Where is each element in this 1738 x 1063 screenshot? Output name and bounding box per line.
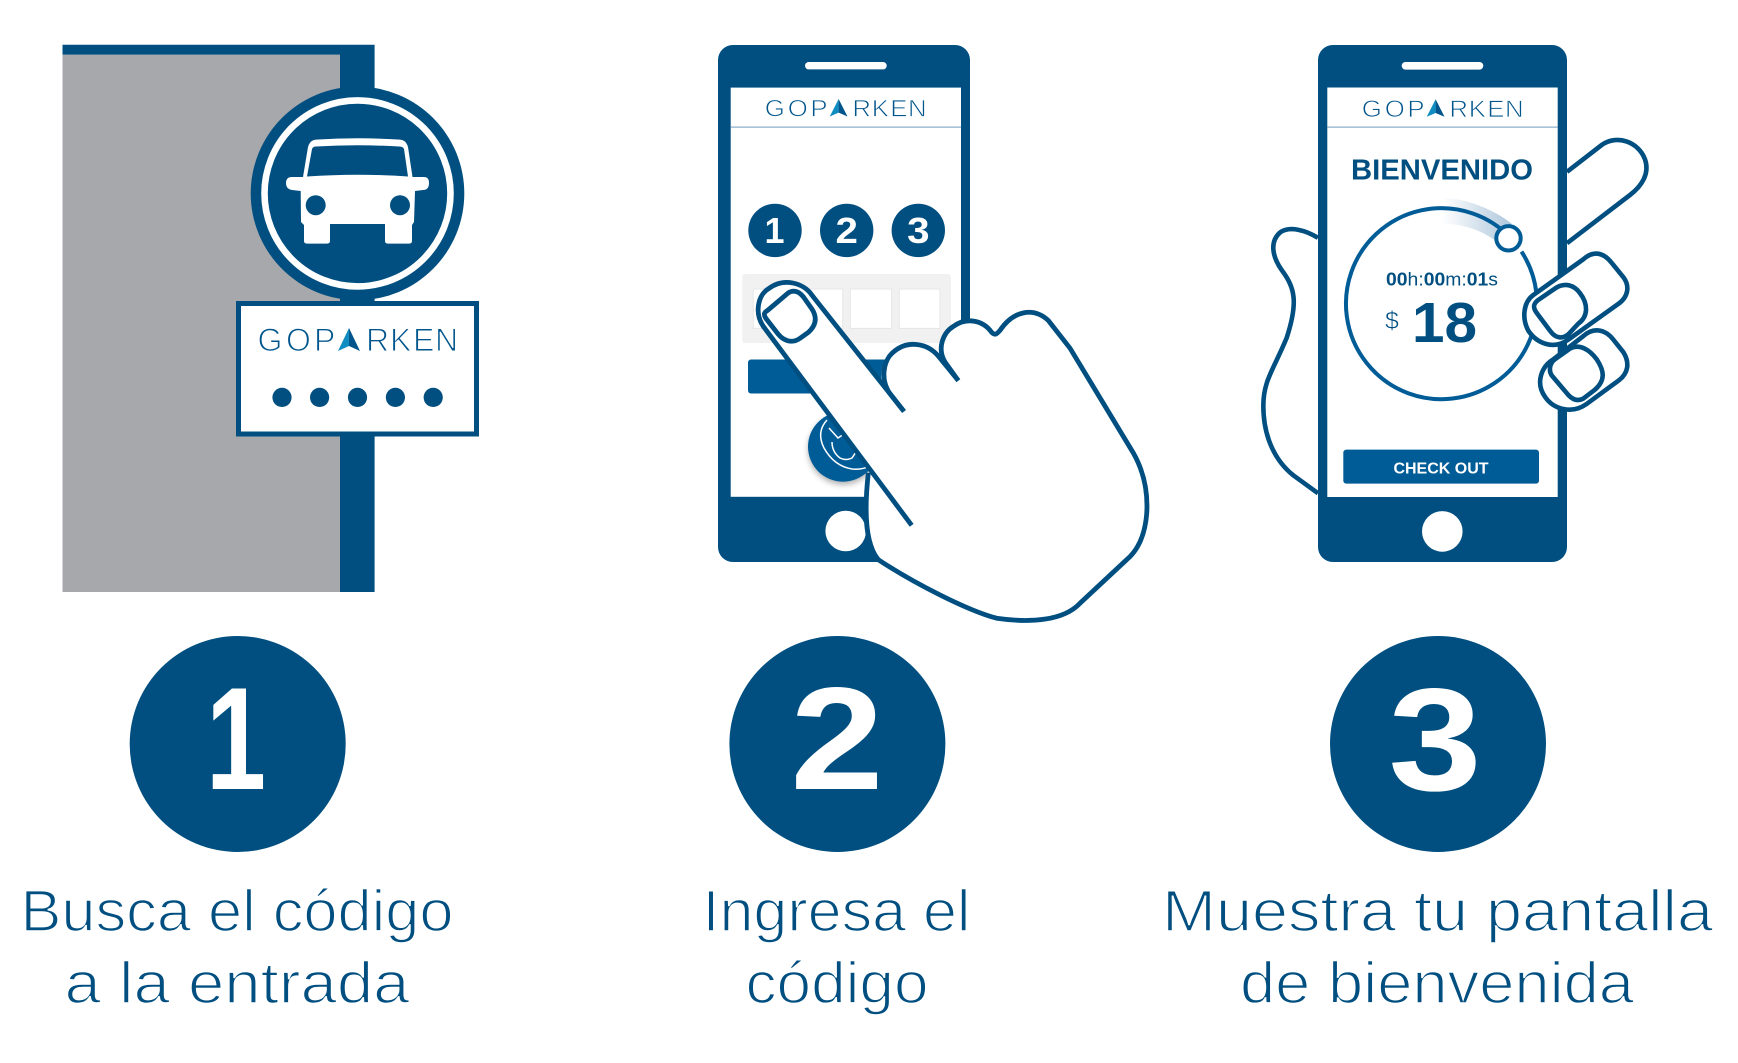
- logo: GOPARKEN: GOPARKEN: [258, 322, 458, 358]
- top finger: [1567, 140, 1646, 243]
- caption step 2: Ingresa el: [702, 879, 970, 944]
- hand with pointing finger: [758, 282, 1147, 620]
- phone body: [718, 45, 970, 562]
- submit button: [748, 360, 943, 394]
- lower finger: [1540, 330, 1627, 410]
- step 3 number badge: [1330, 636, 1546, 852]
- caption step 2: [702, 879, 970, 1016]
- phone screen: [1327, 88, 1558, 497]
- check out button: CHECK OUT: [1393, 460, 1489, 477]
- step numbers on screen: [748, 204, 945, 257]
- caption step 1: [20, 879, 454, 1016]
- icon: phone call button: [808, 412, 878, 482]
- step 2 number badge: 2: [790, 658, 884, 821]
- hand holding phone: [1263, 140, 1646, 493]
- app header line: [1327, 127, 1558, 128]
- logo: GOPARKEN: GOPARKEN: [1362, 95, 1524, 123]
- price symbol: $: [1385, 307, 1399, 335]
- step numbers on screen: 3: [907, 211, 930, 251]
- brand board: [238, 304, 476, 434]
- check out button: [1343, 450, 1539, 484]
- code input panel: [742, 274, 951, 343]
- caption step 2: código: [746, 951, 928, 1016]
- panel: step 3 phone with welcome screen: [1263, 45, 1646, 562]
- logo: GOPARKEN: GOPARKEN: [765, 95, 927, 122]
- elapsed time: 00h:00m:01s: [1386, 270, 1498, 290]
- home button: [1422, 511, 1463, 552]
- phone screen: [731, 88, 961, 497]
- round car sign: [251, 87, 464, 300]
- thumb: [1263, 229, 1318, 493]
- pole and top bar: [62, 45, 375, 592]
- step 1 number badge: 1: [206, 658, 266, 821]
- middle finger: [1524, 254, 1627, 345]
- step 2 number badge: [729, 636, 945, 852]
- caption step 3: [1162, 879, 1714, 1016]
- step 1 number badge: [130, 636, 346, 852]
- caption step 3: de bienvenida: [1240, 951, 1635, 1016]
- panel: step 1 parking sign: [62, 45, 476, 592]
- code dots: [272, 388, 443, 407]
- icon: car: [286, 138, 429, 244]
- panel: step 2 phone with hand: [718, 45, 1147, 620]
- speaker: [1402, 62, 1483, 70]
- grey building wall: [62, 55, 340, 592]
- step numbers on screen: 2: [835, 211, 858, 251]
- app header line: [731, 127, 961, 128]
- caption step 1: Busca el código: [20, 879, 454, 944]
- caption step 3: Muestra tu pantalla: [1162, 879, 1714, 944]
- caption step 1: a la entrada: [64, 951, 410, 1016]
- price amount: 18: [1412, 291, 1477, 355]
- heading: BIENVENIDO: BIENVENIDO: [1351, 155, 1533, 187]
- home button: [825, 511, 866, 551]
- step numbers on screen: 1: [764, 210, 785, 251]
- step 3 number badge: 3: [1388, 659, 1482, 822]
- phone body: [1318, 45, 1567, 562]
- speaker: [805, 62, 887, 69]
- timer dial: [1346, 198, 1537, 399]
